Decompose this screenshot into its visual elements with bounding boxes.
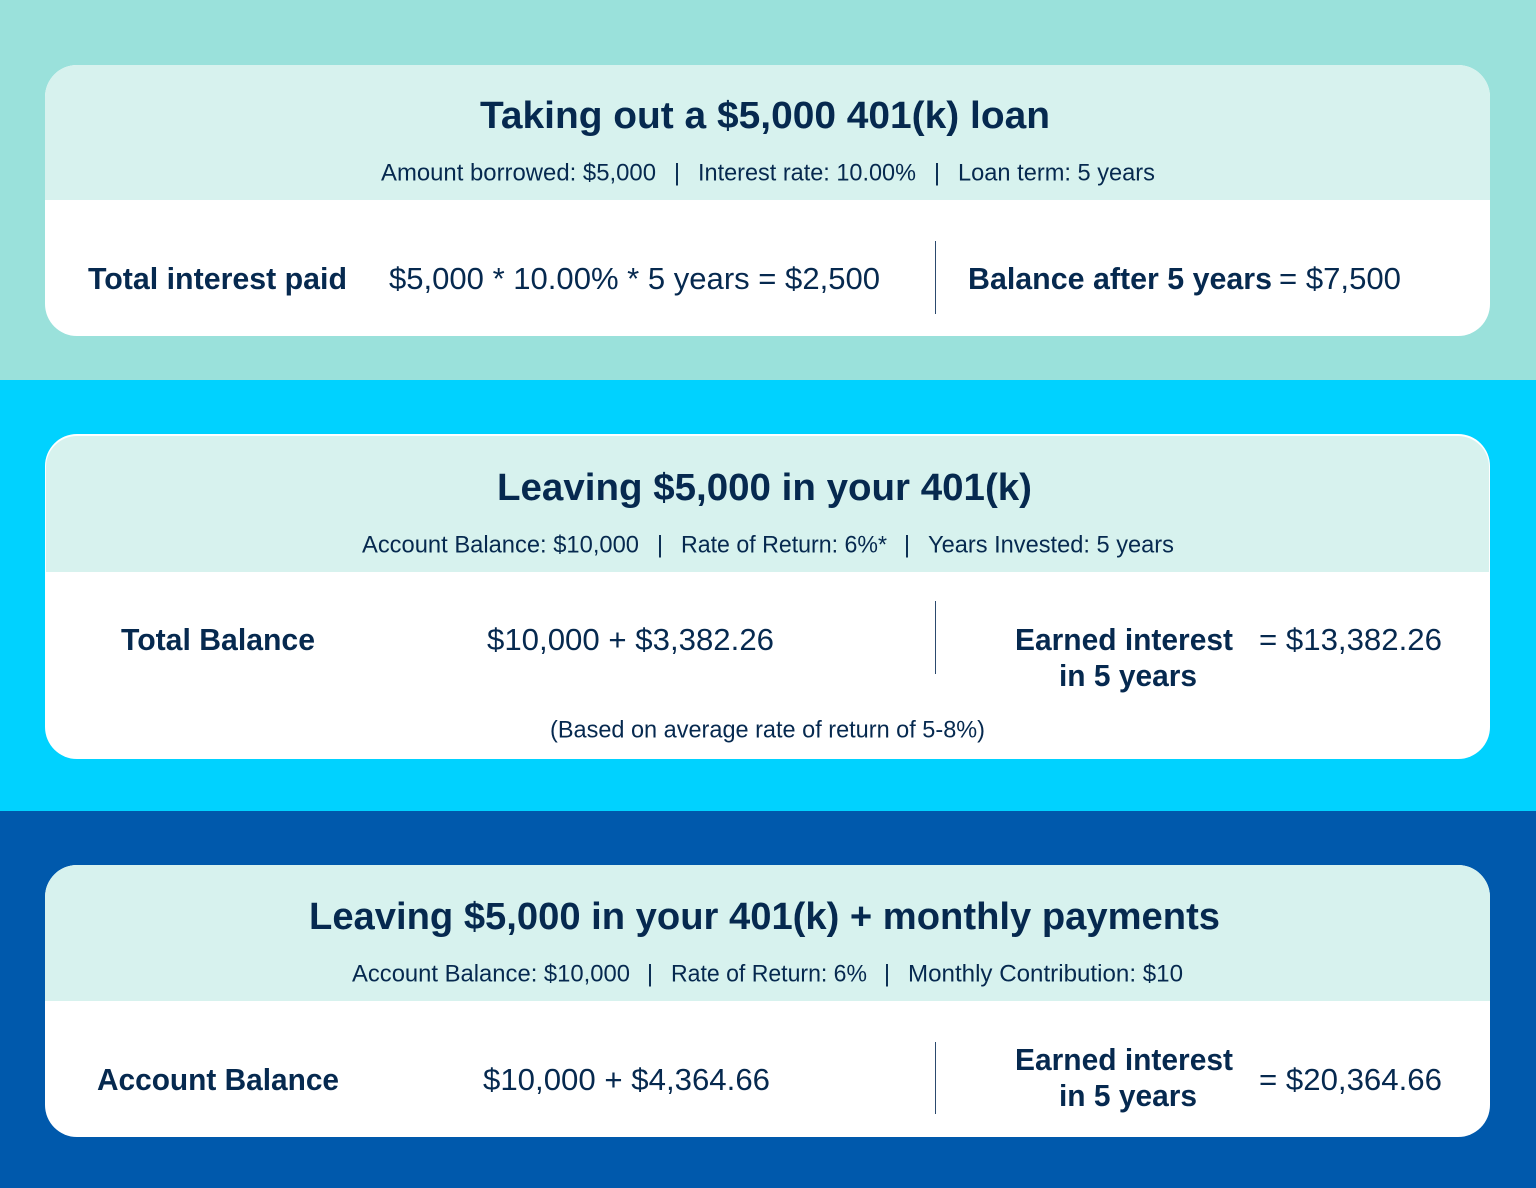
result: earned interest: in 5 years xyxy=(1059,658,1197,693)
result: earned interest: Earned interest xyxy=(1015,622,1233,657)
loan parameters: Amount borrowed: $5,000 xyxy=(381,160,656,186)
heading: Leaving $5,000 in your 401(k) + monthly payments xyxy=(309,896,1220,938)
loan parameters: | xyxy=(674,160,680,186)
account parameters xyxy=(352,960,1183,988)
panel header background xyxy=(45,865,1490,1001)
result: balance after 5 years: Balance after 5 years xyxy=(968,261,1272,296)
result: earned interest: = $13,382.26 xyxy=(1259,622,1442,657)
band: teal background xyxy=(0,0,1536,380)
panel header background xyxy=(45,434,1490,572)
loan parameters: Interest rate: 10.00% xyxy=(698,160,916,186)
band: cyan background xyxy=(0,380,1536,811)
panel: leaving $5,000 plus monthly payments xyxy=(45,865,1490,1137)
account parameters: | xyxy=(884,960,890,988)
result: earned interest: in 5 years xyxy=(1059,1078,1197,1113)
account parameters: Account Balance: $10,000 xyxy=(362,532,639,558)
account parameters: Rate of Return: 6% xyxy=(671,960,867,988)
formula: account balance: $10,000 + $4,364.66 xyxy=(483,1062,770,1097)
account parameters: | xyxy=(904,532,910,558)
formula: total balance: $10,000 + $3,382.26 xyxy=(487,622,774,657)
panel: taking out a 401(k) loan xyxy=(45,65,1490,336)
heading: Taking out a $5,000 401(k) loan xyxy=(480,95,1050,137)
formula: total interest: $5,000 * 10.00% * 5 years = $2,500 xyxy=(389,261,880,296)
account parameters: Rate of Return: 6%* xyxy=(681,532,887,558)
account parameters: Years Invested: 5 years xyxy=(928,532,1174,558)
result: earned interest xyxy=(1015,1042,1442,1113)
result: balance after 5 years: = $7,500 xyxy=(1279,261,1401,296)
account parameters: | xyxy=(657,532,663,558)
account parameters: | xyxy=(647,960,653,988)
footnote: (Based on average rate of return of 5-8%) xyxy=(550,716,985,744)
account parameters: Monthly Contribution: $10 xyxy=(908,960,1183,988)
result: earned interest: Earned interest xyxy=(1015,1042,1233,1077)
account parameters: Account Balance: $10,000 xyxy=(352,960,630,988)
loan parameters xyxy=(381,160,1155,186)
label: total balance: Total Balance xyxy=(121,622,315,657)
label: total interest paid: Total interest paid xyxy=(88,261,347,296)
loan parameters: | xyxy=(934,160,940,186)
result: earned interest xyxy=(1015,622,1442,693)
heading: Leaving $5,000 in your 401(k) xyxy=(497,467,1032,509)
panel header background xyxy=(45,65,1490,200)
label: account balance: Account Balance xyxy=(97,1062,339,1097)
loan parameters: Loan term: 5 years xyxy=(958,160,1155,186)
panel: leaving $5,000 in your 401(k) xyxy=(45,434,1490,759)
band: blue background xyxy=(0,811,1536,1188)
account parameters xyxy=(362,532,1174,558)
result: earned interest: = $20,364.66 xyxy=(1259,1062,1442,1097)
